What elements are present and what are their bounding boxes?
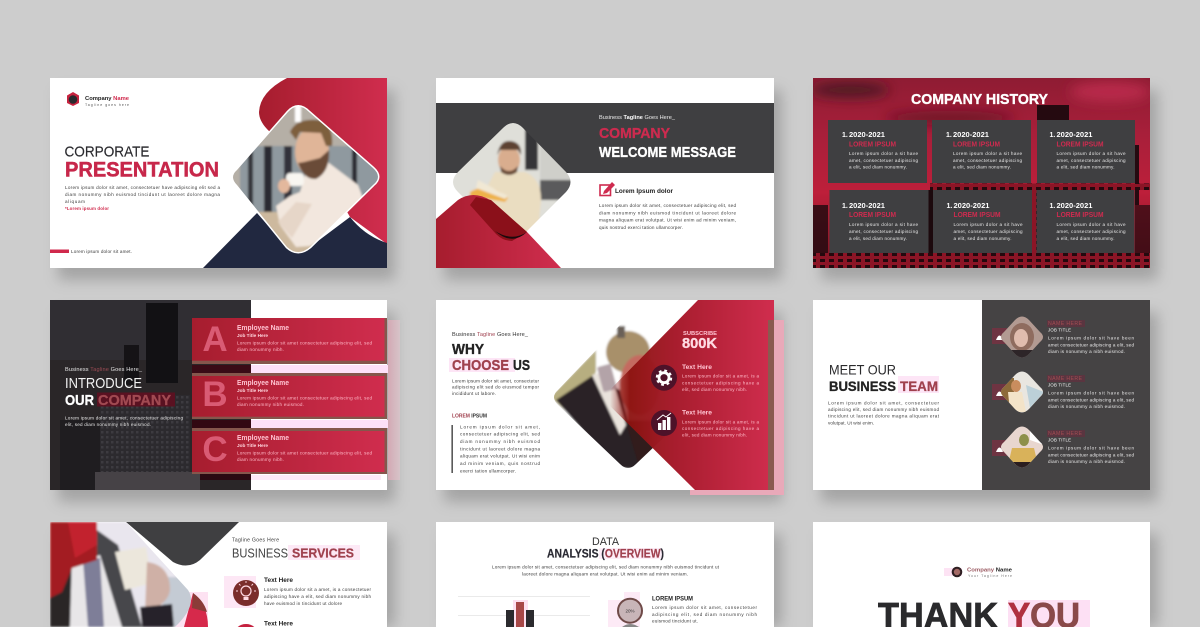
card 4	[830, 190, 928, 253]
card C: diam nonummy nibh.	[237, 457, 284, 462]
heading	[449, 341, 530, 374]
body text: aliquam	[65, 199, 85, 204]
pale pink artefact bands	[251, 320, 400, 480]
panel: introduce our company slide	[50, 300, 400, 490]
card 4: 1.	[842, 203, 848, 210]
card C	[192, 428, 387, 474]
card 6: Lorem ipsum dolor a sit have	[1056, 222, 1126, 227]
card C: Employee Name	[237, 435, 289, 442]
card 5: 2020-2021	[954, 203, 990, 210]
tagline: Tagline Goes Here	[232, 538, 279, 544]
company name: Company Name	[85, 96, 129, 102]
logo	[944, 567, 1012, 578]
card B: Employee Name	[237, 380, 289, 387]
feature 2 text: Lorem ipsum dolor sit a amet, is a	[682, 419, 759, 424]
heading: welcome message: WELCOME MESSAGE	[599, 144, 736, 161]
body text: diam nonummy nibh euismod tincidunt ut laoreet dolore	[599, 210, 736, 215]
intro text: adipiscing elit sed do eiusmod tempor	[452, 385, 539, 390]
feature 1 text: elit, sed diam nonummy nibh.	[682, 387, 747, 392]
service 1 text: Text Here	[264, 577, 294, 584]
panel: why choose us slide	[436, 300, 784, 495]
subheading: LOREM IPSUM	[452, 414, 487, 420]
panel: data analysis slide	[436, 522, 774, 627]
service 1 text: Lorem ipsum dolor sit a amet, is a consectetuer	[264, 587, 371, 592]
card 1: LOREM IPSUM	[849, 142, 896, 149]
donut chart	[608, 592, 642, 627]
thank you title	[878, 596, 1090, 627]
dark side panel	[982, 300, 1150, 490]
heading	[829, 362, 939, 394]
team member 1: JOB TITLE	[1048, 327, 1071, 332]
heading	[232, 545, 360, 561]
card 4: LOREM IPSUM	[849, 212, 896, 219]
panel: business services slide	[50, 522, 387, 627]
intro text: elit, sed diam nonummy nibh euismod.	[65, 422, 151, 427]
panel: thank you slide	[813, 522, 1150, 627]
body text: *Lorem ipsum dolor	[65, 206, 109, 211]
body text: magna aliquam erat volutpat. Ut wisi enim ad minim veniam,	[599, 218, 736, 223]
card 6: 2020-2021	[1056, 203, 1093, 210]
card 4: 2020-2021	[849, 203, 885, 210]
team member 2: JOB TITLE	[1048, 382, 1071, 387]
card 5: Lorem ipsum dolor a sit have	[954, 222, 1023, 227]
team member 3: amet consectetuer adipiscing a elit, sed	[1048, 452, 1134, 457]
card 2: Lorem ipsum dolor a sit have	[953, 151, 1022, 156]
tagline: Your Tagline Here	[968, 574, 1012, 578]
service 1 text	[264, 577, 371, 606]
card 2	[932, 120, 1031, 183]
team member 2: Lorem ipsum dolor sit have been	[1048, 391, 1134, 396]
intro text: tincidunt ut laoreet dolore magna aliquam erat	[828, 414, 940, 419]
card A: Lorem ipsum dolor sit amet consectetuer adipiscing elit, sed	[237, 340, 372, 346]
intro text: Lorem ipsum dolor sit amet, consectetuer adipiscing	[65, 416, 183, 420]
tagline: Business Tagline Goes Here_	[599, 115, 676, 121]
intro text: Lorem ipsum dolor sit amet, consectetuer	[828, 400, 939, 405]
card 1: amet, consectetuer adipiscing	[849, 158, 918, 163]
team member 1: NAME HERE	[1048, 321, 1083, 327]
intro text	[492, 564, 720, 576]
body text: Lorem ipsum dolor sit amet, consectetuer have adipiscing elit sed a	[65, 185, 220, 190]
body text: quis nostrud exerci tation ullamcorper.	[599, 225, 683, 230]
icon: pen and check box	[600, 182, 615, 196]
company name: Company Name	[967, 568, 1012, 574]
feature 1 text	[682, 364, 759, 392]
card 2: LOREM IPSUM	[953, 142, 1000, 149]
heading: our company: OUR	[65, 393, 94, 409]
quote bar and text: diam nonummy nibh euismod	[460, 439, 540, 444]
right side strip	[690, 320, 784, 495]
card 3: 2020-2021	[1056, 132, 1093, 139]
panel: company welcome message slide	[436, 78, 774, 268]
card 4: a elit, sed diam nonummy.	[849, 236, 907, 241]
feature 2 text	[682, 410, 759, 438]
card C: C	[202, 430, 228, 469]
dark top curved shape	[126, 522, 239, 566]
card 1	[828, 120, 927, 183]
team member 3: Lorem ipsum dolor sit have been	[1048, 446, 1134, 451]
card 4: amet, consectetuer adipiscing	[849, 229, 918, 234]
icon: gear	[651, 365, 677, 391]
service 1 text: have euismod in tincidunt ut dolore	[264, 601, 342, 606]
body text: diam nonummy nibh euismod tincidunt ut laoreet dolore magna	[65, 192, 220, 197]
intro text: Lorem ipsum dolor sit amet, consectetuer adipiscing elit, sed diam nonummy nibh euismod tincidunt ut	[492, 564, 720, 569]
intro text: adipiscing elit, sed diam nonummy nibh euismod	[828, 407, 939, 412]
card 2: a elit, sed diam nonummy.	[953, 165, 1011, 170]
card 5	[933, 190, 1032, 253]
icon: light bulb	[224, 576, 259, 608]
heading: US	[513, 357, 530, 374]
heading: CHOOSE	[452, 357, 509, 374]
heading: DATA	[592, 536, 620, 548]
card C: Lorem ipsum dolor sit amet consectetuer adipiscing elit, sed	[237, 450, 372, 456]
heading: TEAM	[900, 378, 938, 394]
body text	[599, 203, 736, 230]
feature 2 text: Text Here	[682, 410, 713, 417]
card 5: LOREM IPSUM	[954, 212, 1001, 219]
team member 3: diam is nonummy a nibh euismod.	[1048, 459, 1125, 464]
slide shadows	[58, 90, 1158, 627]
card 2: 2020-2021	[953, 132, 989, 139]
card C: Job Title Here	[237, 443, 268, 448]
team member 3: NAME HERE	[1048, 431, 1083, 437]
title: PRESENTATION	[65, 158, 219, 182]
card B: diam nonummy nibh euismod.	[237, 402, 304, 407]
red curved corner shape	[436, 195, 561, 268]
card 5: amet, consectetuer adipiscing	[954, 229, 1023, 234]
heading: our company: COMPANY	[98, 393, 171, 409]
team member 3	[992, 426, 1134, 468]
icon: bar chart	[651, 410, 677, 436]
feature 2 text: consectetuer adipiscing have a	[682, 426, 759, 431]
quote bar and text: consectetuer adipiscing elit, sed	[460, 432, 540, 437]
card 3: Lorem ipsum dolor a sit have	[1056, 151, 1126, 156]
card B	[192, 373, 387, 419]
card 6: LOREM IPSUM	[1056, 212, 1104, 219]
team member 3: JOB TITLE	[1048, 437, 1071, 442]
pink and red accent	[175, 592, 208, 627]
photo: man reading	[453, 123, 570, 232]
card 3: amet, consectetuer adipiscing	[1056, 158, 1126, 163]
card 1: Lorem ipsum dolor a sit have	[849, 151, 918, 156]
intro text	[65, 416, 183, 427]
subscribe stat: SUBSCRIBE	[683, 331, 717, 337]
card 3: 1.	[1050, 132, 1055, 139]
heading: WHY	[452, 341, 484, 358]
team member 2: NAME HERE	[1048, 376, 1083, 382]
panel: meet our business team slide	[813, 300, 1150, 490]
card A: A	[202, 320, 228, 359]
legend text: euismod tincidunt ut.	[652, 619, 698, 624]
card A	[192, 318, 387, 364]
feature 1 text: consectetuer adipiscing have a	[682, 380, 759, 385]
card B: Lorem ipsum dolor sit amet consectetuer adipiscing elit, sed	[237, 396, 372, 400]
quote bar and text: aliquam erat volutpat. Ut wisi enim	[460, 454, 540, 459]
card 2: 1.	[946, 132, 952, 139]
photo: man with coffee mug	[50, 522, 200, 627]
quote bar and text	[452, 424, 540, 473]
card B: B	[202, 375, 228, 414]
title	[64, 144, 219, 182]
legend text: LOREM IPSUM	[652, 597, 693, 603]
card B: Job Title Here	[237, 388, 268, 393]
intro text: incididunt ut labore.	[452, 391, 496, 396]
heading: introduce: INTRODUCE	[65, 376, 142, 392]
heading	[547, 536, 664, 561]
quote bar and text: ad minim veniam, quis nostrud	[460, 461, 540, 466]
feature 1 text: Lorem ipsum dolor sit a amet, is a	[682, 374, 759, 379]
tagline: Business Tagline Goes Here_	[452, 332, 529, 338]
card 6: 1.	[1050, 203, 1055, 210]
panel: company history slide	[810, 78, 1150, 268]
card A: Employee Name	[237, 325, 289, 332]
body text	[65, 185, 220, 211]
legend text	[652, 597, 757, 624]
card 6: amet, consectetuer adipiscing	[1056, 229, 1126, 234]
team member 1: Lorem ipsum dolor sit have been	[1048, 336, 1134, 341]
card 2: amet, consectetuer adipiscing	[953, 158, 1022, 163]
logo	[67, 92, 129, 107]
tagline: Tagline goes here	[85, 103, 129, 107]
heading: ANALYSIS (OVERVIEW)	[547, 549, 664, 561]
feature 1 text: Text Here	[682, 364, 713, 371]
bar chart	[458, 596, 590, 627]
intro text: laoreet dolore magna aliquam erat volutpat. Ut wisi enim ad minim veniam.	[522, 571, 688, 576]
photo: man on the phone	[554, 324, 653, 468]
heading: company: COMPANY	[599, 125, 670, 142]
quote bar and text: Lorem ipsum dolor sit amet,	[460, 424, 540, 430]
quote bar and text: exerci tation ullamcorper.	[460, 468, 516, 473]
intro text	[452, 378, 539, 396]
card 5: a elit, sed diam nonummy.	[954, 236, 1012, 241]
card A: Job Title Here	[237, 333, 268, 338]
intro text: volutpat. Ut wisi enim.	[828, 420, 874, 425]
red curved shape	[259, 78, 387, 244]
card 6: a elit, sed diam nonummy.	[1056, 236, 1114, 241]
red city background	[810, 78, 1150, 268]
heading: COMPANY HISTORY	[911, 91, 1048, 108]
heading: our company	[65, 392, 175, 409]
heading: SERVICES	[292, 547, 354, 561]
card 3: LOREM IPSUM	[1056, 142, 1104, 149]
intro text	[828, 400, 940, 425]
service 1 text: adipiscing have a elit, sed diam nonummy nibh	[264, 594, 371, 599]
feature 2 text: elit, sed diam nonummy nibh.	[682, 433, 747, 438]
icon: second service	[238, 624, 254, 627]
title: CORPORATE	[64, 144, 150, 160]
card 1: 1.	[842, 132, 848, 139]
card 5: 1.	[946, 203, 952, 210]
card A: diam nonummy nibh.	[237, 347, 284, 352]
heading: BUSINESS	[829, 378, 896, 394]
dark city photo	[50, 300, 251, 490]
card 6	[1036, 190, 1134, 253]
intro text: Lorem ipsum dolor sit amet, consectetur	[452, 378, 539, 384]
heading: BUSINESS	[232, 547, 288, 561]
tagline: Business Tagline Goes Here_	[65, 367, 143, 373]
team member 1: amet consectetuer adipiscing a elit, sed	[1048, 342, 1134, 347]
subscribe stat: 800K	[682, 336, 718, 352]
dark band	[436, 103, 774, 173]
card 1: a elit, sed diam nonummy.	[849, 165, 907, 170]
panel: corporate presentation slide	[50, 78, 390, 268]
navy corner shape	[203, 213, 387, 268]
donut chart: 20%	[625, 608, 635, 613]
subheading: Lorem Ipsum dolor	[615, 188, 674, 195]
red arrow shape	[602, 300, 774, 490]
card 4: Lorem ipsum dolor a sit have	[849, 222, 918, 227]
body text: Lorem ipsum dolor sit amet, consectetuer adipiscing elit, sed	[599, 203, 736, 208]
team member 2: diam is nonummy a nibh euismod.	[1048, 404, 1125, 409]
team member 1	[992, 316, 1134, 358]
team member 2: amet consectetuer adipiscing a elit, sed	[1048, 397, 1134, 402]
card 3: a elit, sed diam nonummy.	[1056, 165, 1114, 170]
team member 2	[992, 372, 1134, 412]
card 3	[1037, 120, 1135, 183]
legend text: Lorem ipsum dolor sit amet, consectetuer	[652, 605, 757, 610]
quote bar and text: tincidunt ut laoreet dolore magna	[460, 446, 540, 451]
footer bar and note: Lorem ipsum dolor sit amet.	[71, 249, 132, 254]
photo: smiling man with cup	[233, 105, 380, 254]
team member 1: diam is nonummy a nibh euismod.	[1048, 349, 1125, 354]
heading: MEET OUR	[829, 362, 896, 378]
card 1: 2020-2021	[849, 132, 885, 139]
legend text: adipiscing elit, sed diam nonummy nibh	[652, 612, 757, 617]
